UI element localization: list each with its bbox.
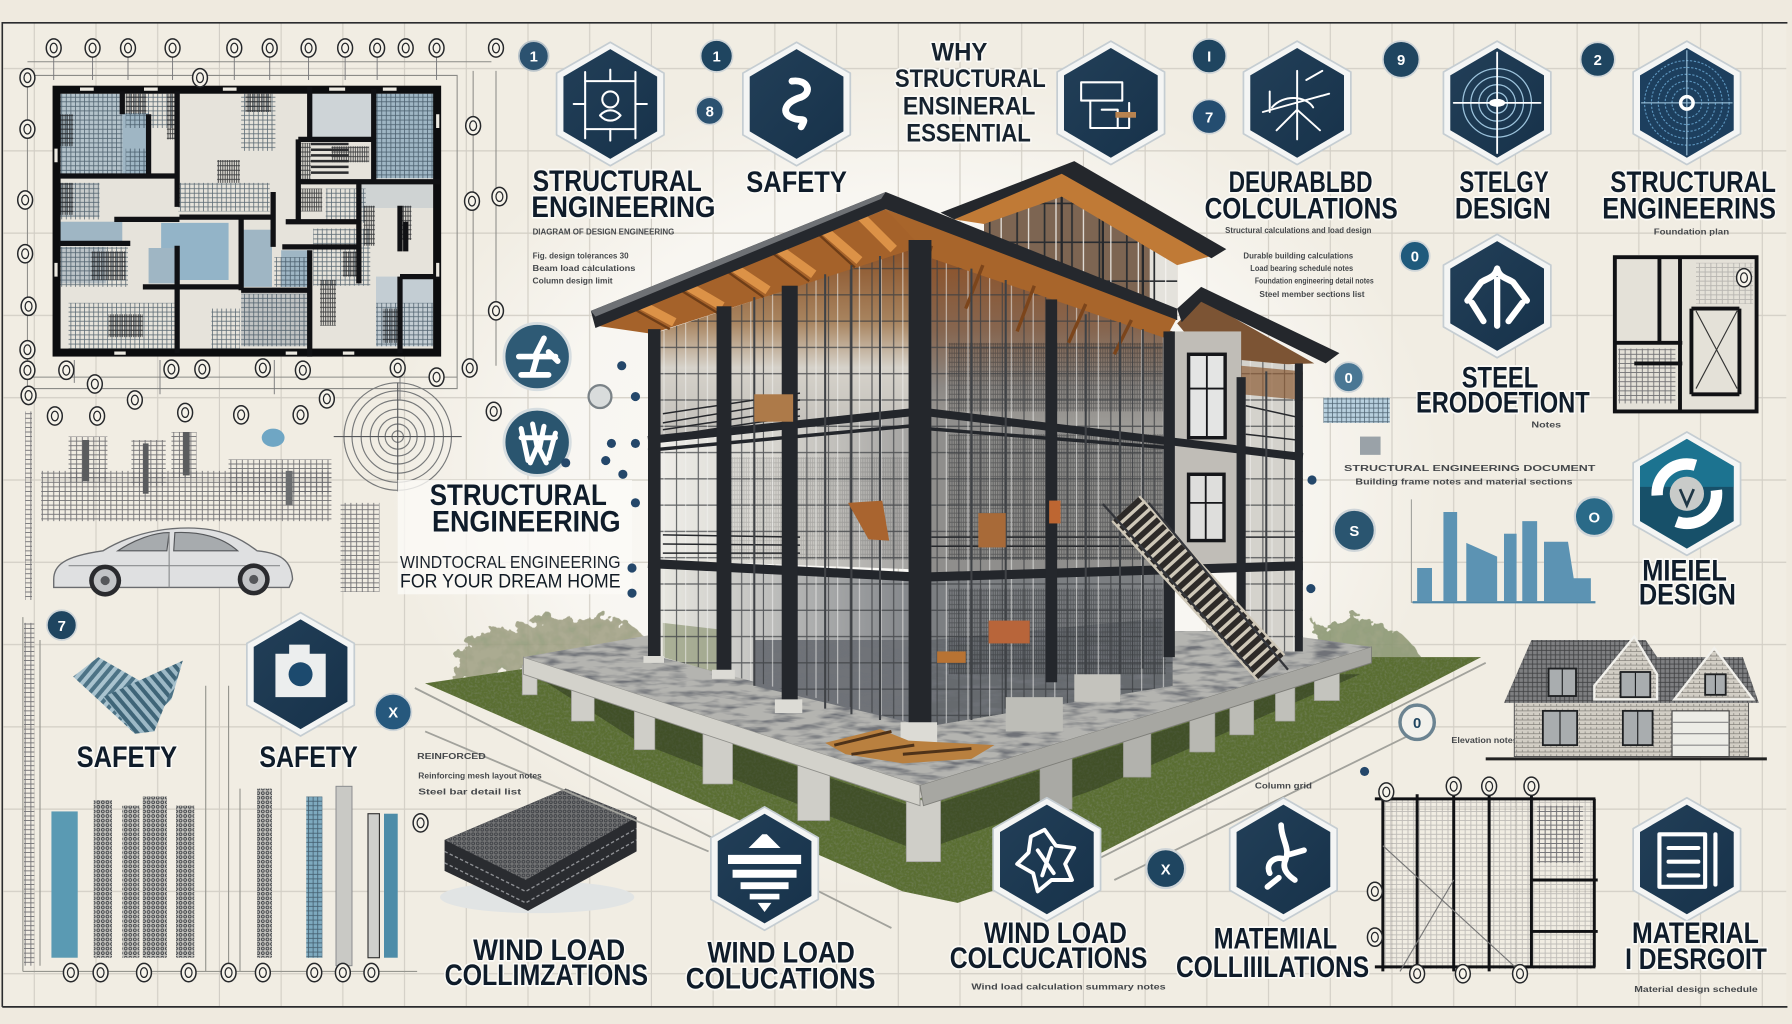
interior materials bbox=[754, 394, 1120, 731]
label: durable calculations: COLCULATIONS bbox=[1205, 192, 1398, 225]
label: structural engineering right bbox=[1602, 166, 1776, 225]
intro caption: ENGINEERING bbox=[432, 505, 621, 538]
fine print notes: Material design schedule bbox=[1634, 985, 1758, 994]
plan dimension lines bbox=[27, 57, 496, 400]
hexagon: load calculations bbox=[993, 798, 1101, 921]
fine print notes: Fig. design tolerances 30 bbox=[533, 251, 629, 260]
hexagon: safety bbox=[743, 42, 850, 166]
left reinforced columns bbox=[23, 617, 428, 982]
label: material design: I DESRGOIT bbox=[1625, 943, 1767, 976]
fine print notes: Load bearing schedule notes bbox=[1250, 264, 1354, 273]
column bases bbox=[643, 656, 937, 743]
grid bubbles bbox=[18, 39, 507, 425]
blue schedule strip bbox=[1323, 398, 1390, 455]
fine print notes: Steel member sections list bbox=[1259, 290, 1365, 299]
number badges: 1 bbox=[712, 50, 721, 66]
radial ring diagram bbox=[334, 383, 462, 491]
blue rooms bbox=[59, 94, 434, 346]
label: wind load colcucations bbox=[950, 917, 1147, 975]
number badges: 2 bbox=[1594, 53, 1602, 69]
fine print notes: Beam load calculations bbox=[533, 264, 636, 273]
hexagon: house frame bbox=[1057, 41, 1165, 165]
fine print notes: DIAGRAM OF DESIGN ENGINEERING bbox=[533, 227, 674, 236]
label: wind load colcucations: COLCUCATIONS bbox=[950, 942, 1147, 975]
grass lawn bbox=[425, 657, 1481, 903]
label: material collations: MATEMIAL bbox=[1214, 923, 1337, 956]
label: wind load collimzations: COLLIMZATIONS bbox=[445, 959, 648, 992]
hexagon: safety camera bbox=[247, 613, 354, 736]
label: structural engineering: ENGINEERING bbox=[531, 191, 715, 224]
number badges: 1 bbox=[530, 50, 538, 66]
label: steel erection bbox=[1416, 361, 1590, 420]
fine print notes: STRUCTURAL ENGINEERING DOCUMENT bbox=[1344, 464, 1596, 473]
hexagon: calculations bbox=[1243, 41, 1351, 165]
label: wind load collimzations bbox=[445, 934, 648, 992]
label: structural engineering: STRUCTURAL bbox=[533, 165, 702, 198]
blue marker bbox=[262, 429, 285, 447]
number badges: O bbox=[1589, 510, 1600, 526]
number badges bbox=[47, 39, 1615, 888]
label: model design bbox=[1639, 555, 1736, 612]
title: why structural engineering essential: ESSENTIAL bbox=[906, 120, 1031, 148]
intro caption: WINDTOCRAL ENGINEERING bbox=[400, 552, 621, 572]
number badges: 0 bbox=[1344, 371, 1353, 387]
hexagon: wind load bbox=[711, 807, 818, 930]
label: model design: MIEIEL bbox=[1642, 555, 1727, 588]
fine print notes: Foundation engineering detail notes bbox=[1255, 276, 1374, 285]
label: wind load collimzations: WIND LOAD bbox=[473, 934, 625, 967]
wall window gaps bbox=[56, 89, 438, 353]
label: safety left: SAFETY bbox=[77, 741, 177, 774]
number badges: 7 bbox=[58, 619, 66, 635]
number badges: S bbox=[1349, 524, 1359, 540]
floor plan blueprint bbox=[18, 39, 507, 425]
fine print notes: Building frame notes and material sections bbox=[1355, 478, 1573, 487]
hexagon: structural engineering 2 bbox=[1633, 41, 1741, 165]
fine print notes: Wind load calculation summary notes bbox=[971, 983, 1166, 992]
balcony rails bbox=[663, 393, 1297, 553]
interior mullions bbox=[754, 256, 1266, 720]
sketched skyline bbox=[25, 411, 379, 600]
fine print notes: Column design limit bbox=[533, 276, 613, 285]
concrete piers bbox=[522, 665, 1339, 862]
label: material design: MATERIAL bbox=[1632, 917, 1759, 950]
rebar bundle icon bbox=[73, 657, 183, 734]
fine print notes: Structural calculations and load design bbox=[1225, 226, 1372, 235]
right glass faces bbox=[931, 257, 1173, 726]
dark fixtures bbox=[59, 94, 411, 343]
rear wing glazing bbox=[1241, 360, 1303, 651]
label: wind load colucations: COLUCATIONS bbox=[686, 963, 875, 996]
timber debris bbox=[825, 729, 994, 763]
label: steel erection: STEEL bbox=[1462, 361, 1538, 394]
number badges: 7 bbox=[1205, 110, 1213, 126]
number badges: 8 bbox=[706, 105, 714, 121]
title: why structural engineering essential: STRUCTURAL bbox=[895, 65, 1046, 93]
label: steel erection: ERODOETIONT bbox=[1416, 387, 1590, 420]
number badges: X bbox=[1161, 862, 1171, 878]
number badges: 0 bbox=[1411, 250, 1419, 266]
label: wind load colcucations: WIND LOAD bbox=[984, 917, 1127, 950]
label: model design: DESIGN bbox=[1639, 579, 1736, 612]
label: safety second: SAFETY bbox=[259, 741, 358, 774]
concrete foundation slab bbox=[523, 631, 1371, 806]
number badges: X bbox=[388, 706, 398, 722]
hexagon: model design bbox=[1633, 432, 1741, 555]
plan slab bbox=[54, 86, 440, 354]
title: why structural engineering essential: WHY bbox=[931, 39, 988, 67]
round icon: engineering A bbox=[504, 323, 570, 390]
title: why structural engineering essential bbox=[895, 39, 1046, 148]
roof soffit bbox=[597, 209, 1177, 354]
fine print notes: Durable building calculations bbox=[1243, 251, 1354, 260]
building frame bbox=[591, 161, 1339, 763]
label: steel design: DESIGN bbox=[1455, 192, 1551, 225]
label: wind load colucations: WIND LOAD bbox=[707, 936, 855, 969]
rear wing roof bbox=[1177, 287, 1339, 366]
hexagon: material calculations bbox=[1230, 798, 1337, 921]
round icon: engineering B bbox=[504, 409, 570, 475]
walkway edges bbox=[415, 663, 1486, 928]
number badges: 9 bbox=[1397, 53, 1405, 69]
number badges: I bbox=[1207, 50, 1211, 66]
hexagon: structural engineering bbox=[557, 42, 664, 166]
hexagon: steel erection bbox=[1443, 234, 1551, 358]
label: wind load colucations bbox=[686, 936, 875, 996]
label: steel design: STELGY bbox=[1459, 166, 1549, 199]
label: structural engineering bbox=[531, 165, 715, 224]
stair stripes bbox=[311, 144, 349, 173]
room hatching bbox=[59, 94, 434, 349]
label: durable calculations bbox=[1205, 166, 1398, 225]
label: material design bbox=[1625, 917, 1767, 976]
fine print notes: Elevation notes bbox=[1451, 736, 1518, 745]
fine print notes: REINFORCED bbox=[417, 752, 486, 761]
label: durable calculations: DEURABLBD bbox=[1229, 166, 1373, 199]
intro caption bbox=[398, 479, 632, 594]
rear wing wall bbox=[1173, 331, 1241, 566]
top right framing plan bbox=[1613, 255, 1758, 413]
floor beams bbox=[648, 411, 1303, 577]
fine print notes: Column grid bbox=[1255, 782, 1312, 791]
title: why structural engineering essential: ENSINERAL bbox=[903, 92, 1035, 120]
left glass faces bbox=[661, 249, 909, 722]
plan walls bbox=[57, 87, 440, 357]
fine print notes: Notes bbox=[1531, 420, 1562, 429]
fine print notes bbox=[417, 226, 1758, 994]
label: material collations: COLLIIILATIONS bbox=[1176, 951, 1369, 984]
main roof bbox=[591, 192, 1177, 328]
hexagon: material design bbox=[1633, 798, 1741, 921]
fine print notes: Steel bar detail list bbox=[418, 787, 522, 796]
suburban house sketch bbox=[1486, 637, 1767, 759]
label: material collations bbox=[1176, 923, 1369, 984]
connector dots bbox=[561, 361, 1369, 776]
intro caption: STRUCTURAL bbox=[430, 479, 607, 512]
steel mesh stack bbox=[440, 789, 637, 913]
label: steel design bbox=[1455, 166, 1551, 225]
label: safety: SAFETY bbox=[746, 166, 847, 199]
shrubs bbox=[451, 617, 1423, 686]
upper storey bbox=[984, 189, 1177, 320]
intro caption: FOR YOUR DREAM HOME bbox=[400, 570, 621, 592]
steel columns bbox=[648, 240, 1303, 734]
number badges: 0 bbox=[1413, 716, 1421, 732]
bar chart bbox=[1411, 499, 1595, 602]
lower framing plan bbox=[1367, 777, 1598, 983]
fine print notes: Reinforcing mesh layout notes bbox=[418, 771, 542, 780]
fine print notes: Foundation plan bbox=[1654, 227, 1729, 236]
upper roof bbox=[941, 161, 1226, 265]
hexagon: steel design bbox=[1443, 41, 1551, 165]
staircase bbox=[1103, 503, 1288, 671]
sedan car sketch bbox=[54, 528, 293, 597]
slab shadow on lawn bbox=[537, 674, 1360, 851]
